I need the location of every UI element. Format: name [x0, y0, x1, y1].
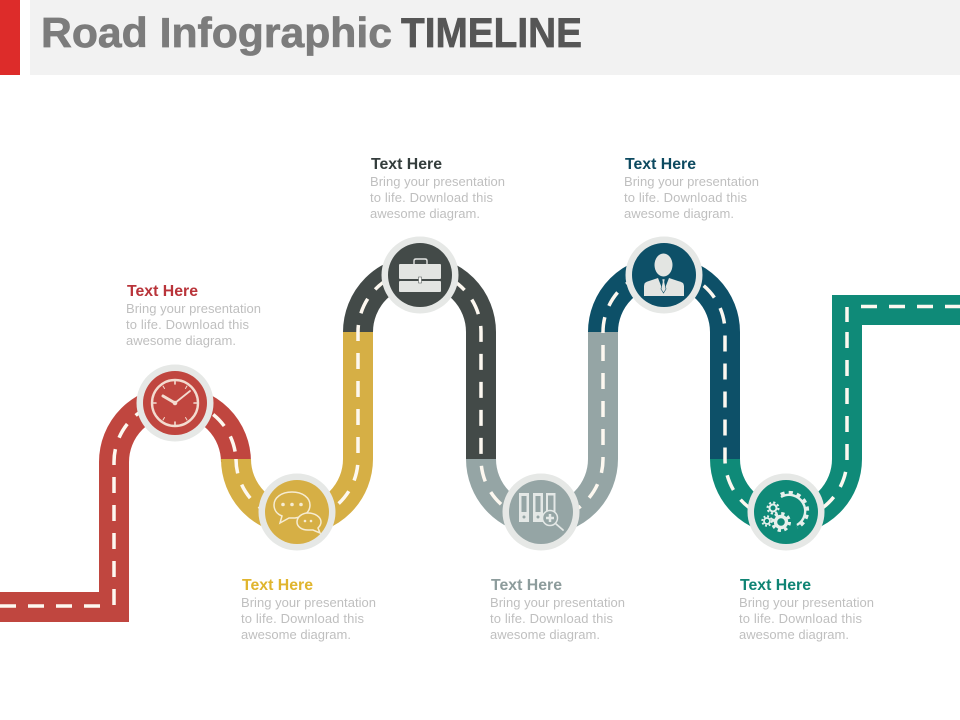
- text block: navy: awesome diagram.: [624, 206, 734, 221]
- text block: navy: Text Here: [625, 156, 696, 173]
- text block: dark grey: Text Here: [371, 156, 442, 173]
- text block: red: awesome diagram.: [126, 333, 236, 348]
- text block: teal: Bring your presentation: [739, 595, 874, 610]
- text block: teal: Text Here: [740, 577, 811, 594]
- node: chat: [258, 474, 336, 550]
- text block: navy: Bring your presentation: [624, 174, 759, 189]
- text block: yellow: Bring your presentation: [241, 595, 376, 610]
- node: clock: [136, 364, 214, 442]
- road segment: yellow: [236, 332, 358, 520]
- road segment: light grey: [481, 332, 603, 520]
- text block: dark grey: [370, 156, 505, 221]
- text block: light grey: awesome diagram.: [490, 627, 600, 642]
- road: winding timeline: [0, 270, 960, 607]
- icon: briefcase: [399, 259, 441, 292]
- text block: yellow: Text Here: [242, 577, 313, 594]
- text block: teal: to life. Download this: [739, 611, 862, 626]
- icon: binders and magnifier: [519, 493, 563, 530]
- text block: light grey: [490, 577, 625, 642]
- text block: red: Text Here: [127, 283, 198, 300]
- road segment: teal: [725, 310, 960, 520]
- text block: light grey: Text Here: [491, 577, 562, 594]
- text block: yellow: to life. Download this: [241, 611, 364, 626]
- text block: red: to life. Download this: [126, 317, 250, 332]
- text block: light grey: to life. Download this: [490, 611, 614, 626]
- icon: speech bubbles: [274, 492, 321, 533]
- node: gears: [748, 474, 824, 550]
- header accent: red block: [0, 0, 20, 75]
- title: Road Infographic: [41, 9, 392, 56]
- text block: red: Bring your presentation: [126, 301, 261, 316]
- icon: gears: [762, 493, 807, 530]
- road segment: navy: [603, 271, 725, 459]
- title: TIMELINE: [401, 9, 582, 56]
- node: briefcase: [382, 236, 458, 314]
- text block: navy: [624, 156, 759, 221]
- road centre dashes: [0, 270, 960, 606]
- text block: red: [126, 283, 261, 348]
- node: binders: [502, 474, 580, 550]
- text block: teal: [739, 577, 874, 642]
- icon: businessman: [644, 254, 684, 296]
- text block: teal: awesome diagram.: [739, 627, 849, 642]
- road segment: red: [0, 401, 236, 607]
- node: person: [626, 236, 702, 314]
- header band: [30, 0, 960, 75]
- text block: light grey: Bring your presentation: [490, 595, 625, 610]
- text block: dark grey: Bring your presentation: [370, 174, 505, 189]
- title: [41, 9, 582, 56]
- text block: navy: to life. Download this: [624, 190, 748, 205]
- text block: yellow: [241, 577, 376, 642]
- icon: clock: [152, 380, 198, 426]
- road segment: dark grey: [358, 270, 481, 459]
- text block: dark grey: to life. Download this: [370, 190, 494, 205]
- text block: yellow: awesome diagram.: [241, 627, 351, 642]
- text block: dark grey: awesome diagram.: [370, 206, 480, 221]
